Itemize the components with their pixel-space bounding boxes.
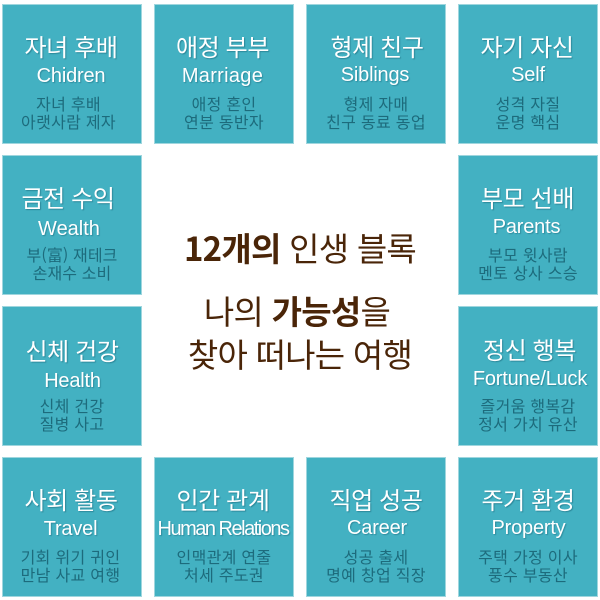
center heading: 12개의 인생 블록	[184, 223, 416, 271]
panel: career: 성공 출세 명예 창업 직장	[326, 544, 426, 586]
panel: human relations: 인맥관계 연줄 처세 주도권	[177, 544, 271, 586]
panel: fortune	[458, 306, 598, 446]
panel: fortune: 즐거움 행복감 정서 가치 유산	[478, 393, 578, 435]
panel: self: Self	[511, 64, 545, 86]
panel: marriage: 애정 부부	[176, 28, 269, 63]
panel: wealth: 부(富) 재테크 손재수 소비	[26, 242, 117, 284]
panel: parents: Parents	[493, 216, 560, 238]
panel: fortune: Fortune/Luck	[473, 368, 587, 390]
panel: career: Career	[347, 517, 407, 539]
panel: children: 자녀 후배 아랫사람 제자	[21, 91, 116, 133]
panel: fortune: 정신 행복	[483, 331, 576, 366]
panel: health: Health	[44, 370, 101, 392]
panel: parents: 부모 윗사람 멘토 상사 스승	[478, 242, 578, 284]
panel: property: 주거 환경	[481, 481, 575, 516]
center text: 찾아 떠나는 여행	[188, 329, 412, 377]
panel: parents: 부모 선배	[481, 179, 574, 214]
panel: health: 신체 건강 질병 사고	[40, 393, 104, 435]
panel: marriage: Marriage	[182, 65, 263, 87]
panel: human relations: Human Relations	[158, 518, 288, 540]
panel: siblings	[306, 4, 446, 144]
panel: parents	[458, 155, 598, 295]
panel: travel	[2, 457, 142, 597]
panel: human relations: 인간 관계	[176, 481, 270, 516]
panel: siblings: 형제 친구	[330, 28, 424, 63]
panel: self: 성격 자질 운명 핵심	[496, 91, 560, 133]
panel: self: 자기 자신	[480, 28, 574, 63]
panel: travel: 사회 활동	[24, 481, 118, 516]
panel: wealth	[2, 155, 142, 295]
panel: property: 주택 가정 이사 풍수 부동산	[478, 544, 578, 586]
panel: siblings: 형제 자매 친구 동료 동업	[326, 91, 426, 133]
panel: siblings: Siblings	[341, 64, 409, 86]
panel: career: 직업 성공	[329, 481, 423, 516]
panel: health: 신체 건강	[25, 332, 119, 367]
panel: property	[458, 457, 598, 597]
panel: marriage: 애정 혼인 연분 동반자	[184, 91, 264, 133]
center text: 나의 가능성을	[204, 286, 390, 334]
panel: wealth: Wealth	[38, 218, 100, 240]
panel: children: 자녀 후배	[24, 28, 118, 63]
panel: career	[306, 457, 446, 597]
panel: self	[458, 4, 598, 144]
panel: children: Chidren	[37, 65, 105, 87]
panel: marriage	[154, 4, 294, 144]
panel: health	[2, 306, 142, 446]
panel: travel: Travel	[44, 518, 97, 540]
panel: children	[2, 4, 142, 144]
panel: wealth: 금전 수익	[21, 179, 115, 214]
center text	[188, 286, 412, 377]
panel: travel: 기회 위기 귀인 만남 사교 여행	[21, 544, 120, 586]
panel: human relations	[154, 457, 294, 597]
panel: property: Property	[492, 517, 566, 539]
